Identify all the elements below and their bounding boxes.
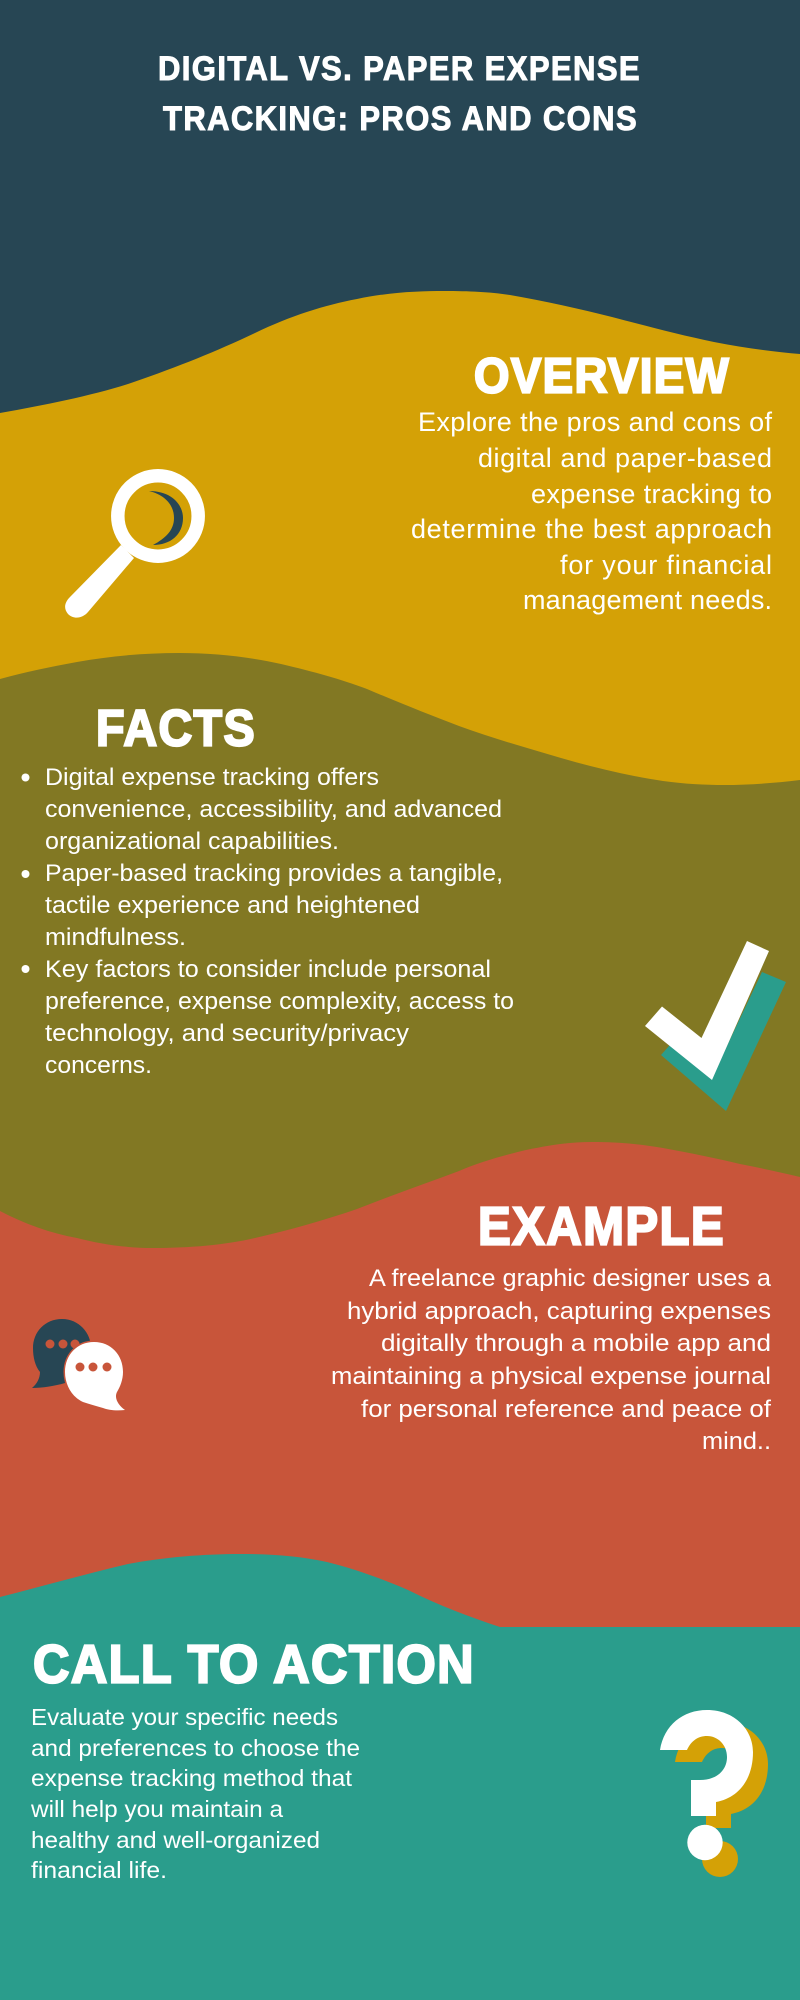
text block: overview: for your financial xyxy=(560,550,772,580)
text block: example: mind.. xyxy=(702,1428,771,1455)
text block: call to action: healthy and well-organized xyxy=(31,1827,320,1853)
bullet list: facts: technology, and security/privacy xyxy=(45,1020,409,1047)
text block: call to action xyxy=(30,1704,360,1883)
panel: example wave xyxy=(0,1142,800,2000)
bullet list: facts xyxy=(22,764,514,1079)
icon: check mark xyxy=(645,941,786,1111)
text block: example: hybrid approach, capturing expenses xyxy=(347,1298,771,1325)
heading: overview: OVERVIEW xyxy=(474,350,730,404)
text block: example xyxy=(331,1265,772,1455)
text block: call to action: and preferences to choose the xyxy=(31,1735,360,1761)
text block: call to action: will help you maintain a xyxy=(30,1796,283,1822)
title xyxy=(158,50,641,138)
text block: overview: management needs. xyxy=(523,585,772,615)
bullet list: facts: tactile experience and heightened xyxy=(45,892,420,919)
bullet list: facts: preference, expense complexity, access to xyxy=(45,988,514,1015)
heading: call to action: CALL TO ACTION xyxy=(33,1634,475,1694)
icon: speech bubbles xyxy=(32,1319,125,1410)
panel: facts wave xyxy=(0,653,800,2000)
text block: call to action: financial life. xyxy=(31,1857,167,1883)
icon: magnifying glass xyxy=(65,476,198,618)
bullet list: facts: mindfulness. xyxy=(45,924,186,951)
text block: overview: determine the best approach xyxy=(411,514,772,544)
bullet list: facts: concerns. xyxy=(45,1052,152,1079)
bullet list: facts: Paper-based tracking provides a tangible, xyxy=(45,860,503,887)
bullet list: facts: organizational capabilities. xyxy=(45,828,339,855)
title: TRACKING: PROS AND CONS xyxy=(163,100,638,138)
panel: call to action wave xyxy=(0,1554,800,2000)
heading: facts: FACTS xyxy=(96,700,256,756)
bullet list: facts: Digital expense tracking offers xyxy=(45,764,379,791)
heading: example: EXAMPLE xyxy=(478,1196,725,1256)
text block: call to action: Evaluate your specific needs xyxy=(31,1704,338,1730)
text block: overview: Explore the pros and cons of xyxy=(418,407,772,437)
text block: overview: digital and paper-based xyxy=(478,443,772,473)
text block: example: digitally through a mobile app and xyxy=(381,1330,771,1357)
text block: example: A freelance graphic designer uses a xyxy=(369,1265,772,1292)
bullet list: facts: Key factors to consider include personal xyxy=(45,956,491,983)
text block: call to action: expense tracking method that xyxy=(31,1765,353,1791)
text block: overview: expense tracking to xyxy=(531,479,772,509)
icon: question mark xyxy=(660,1710,768,1877)
text block: example: for personal reference and peace of xyxy=(361,1396,771,1423)
text block: example: maintaining a physical expense journal xyxy=(331,1363,771,1390)
bullet list: facts: convenience, accessibility, and advanced xyxy=(45,796,502,823)
title: DIGITAL VS. PAPER EXPENSE xyxy=(158,50,641,88)
text block: overview xyxy=(411,407,772,615)
